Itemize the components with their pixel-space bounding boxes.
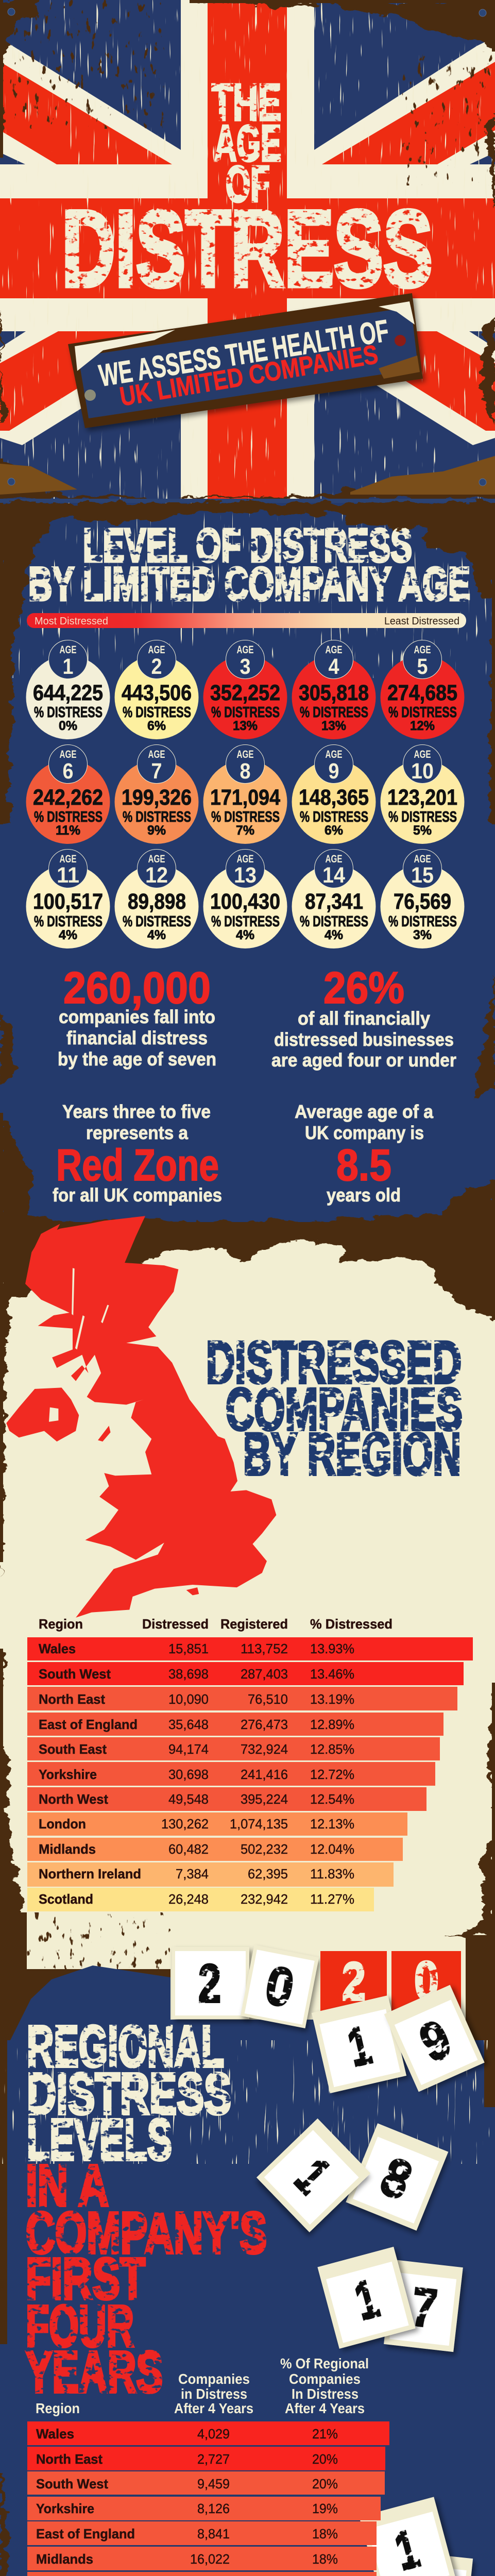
card: red 0: 0 [414, 1951, 439, 2011]
table header: % Distressed [310, 1616, 392, 1632]
row: Midlands [27, 2547, 377, 2570]
chart: age 4: % DISTRESS [300, 704, 368, 721]
row: South East: 94,174 [168, 1741, 209, 1757]
chart: age 10: 5% [413, 823, 432, 838]
chart: age 10: 10 [411, 759, 434, 784]
stat: average age 8.5: Average age of a [295, 1101, 434, 1122]
row: North East: 2,727 [197, 2451, 230, 2467]
row: North West: 12.54% [310, 1791, 354, 1807]
stat: 260,000 companies: 260,000 [63, 963, 211, 1013]
chart: age 6: AGE [60, 749, 76, 760]
panel: level of distress by company age [0, 499, 495, 1236]
chart: age 7: 9% [147, 823, 166, 838]
chart: age 3: 13% [233, 719, 258, 733]
panel: regional section background [0, 972, 495, 2020]
table header: Companies [178, 2371, 250, 2387]
row: North East: 76,510 [248, 1691, 288, 1707]
card: 1 [317, 2247, 416, 2349]
heading: in a company's first four years: COMPANY'S [26, 2200, 267, 2265]
chart: age 7: AGE [148, 749, 165, 760]
row: South West: 20% [312, 2476, 338, 2492]
heading: level of distress [28, 519, 470, 611]
chart: age 4: AGE [326, 644, 342, 656]
row: Yorkshire: 19% [312, 2501, 338, 2516]
row: Midlands: Midlands [39, 1841, 96, 1857]
chart: age 11 [26, 849, 110, 948]
chart: age 8: % DISTRESS [211, 809, 280, 825]
chart: age 2: 443,506 [122, 681, 192, 705]
chart: age 10 [380, 745, 465, 844]
chart: age 14 [292, 849, 376, 948]
chart: age 1: 1 [63, 654, 73, 679]
card: 1: 1 [349, 2268, 385, 2332]
chart: age 12: 89,898 [128, 889, 186, 914]
chart: age 8 [203, 745, 287, 844]
card: 8: 8 [373, 2146, 419, 2212]
row: London: London [39, 1816, 86, 1832]
chart: age 7 [114, 745, 199, 844]
flag: central cross [0, 0, 495, 499]
row: Scotland: 232,942 [241, 1891, 288, 1907]
row: South West: 38,698 [168, 1666, 209, 1682]
calendar cards: 2020 [172, 1945, 461, 2028]
stat: 26% of businesses [271, 963, 456, 1071]
row: North West: North West [39, 1791, 108, 1807]
card: 0 [241, 1945, 319, 2028]
row: Scotland: Scotland [39, 1891, 93, 1907]
row: Wales: 13.93% [310, 1641, 354, 1656]
map: streaks [72, 1268, 109, 1349]
row: Northern Ireland: Northern Ireland [39, 1866, 141, 1882]
row: East of England: 35,648 [168, 1717, 209, 1732]
chart: age 1: % DISTRESS [34, 704, 103, 721]
table header: Distressed [142, 1616, 209, 1632]
chart: age 5: 12% [410, 719, 435, 733]
stat: red zone: Years three to five [62, 1101, 211, 1122]
row: Yorkshire [27, 2497, 381, 2520]
rust band [0, 503, 495, 824]
label: we assess the health of uk limited companies: UK LIMITED COMPANIES [117, 340, 380, 412]
row: Wales: 113,752 [241, 1641, 288, 1656]
chart: age 5 [380, 640, 465, 739]
card: 1 [359, 2497, 456, 2576]
row: London [27, 1812, 407, 1836]
row: Scotland: 26,248 [168, 1891, 209, 1907]
chart: age 13 [203, 849, 287, 948]
chart: age 11: 100,517 [33, 889, 103, 914]
row: North East [27, 2447, 385, 2470]
chart: age 9: 9 [329, 759, 339, 784]
chart: age 9: AGE [326, 749, 342, 760]
table header: Region [39, 1616, 83, 1632]
chart: age 9: % DISTRESS [300, 809, 368, 825]
chart: age 12: % DISTRESS [123, 913, 191, 930]
flag: rust edges [0, 0, 495, 499]
chart: age 15: 15 [411, 863, 434, 888]
stat: 260,000 companies: by the age of seven [58, 1048, 216, 1070]
row: London: 1,074,135 [230, 1816, 288, 1832]
row: North West [27, 1787, 426, 1811]
heading: regional distress levels: DISTRESS [27, 2061, 231, 2126]
card: 2 [172, 1947, 249, 2019]
table header: in Distress [181, 2386, 247, 2402]
chart: age 10: 123,201 [387, 785, 457, 810]
card: 0: 0 [261, 1955, 299, 2019]
row: Midlands [27, 1838, 403, 1861]
row: North East: 10,090 [168, 1691, 209, 1707]
chart: age 14: 14 [322, 863, 345, 888]
chart: age 7: 7 [151, 759, 162, 784]
stat: average age 8.5: UK company is [305, 1122, 424, 1143]
row: North West [27, 2572, 377, 2576]
chart: age 15: 3% [413, 928, 432, 942]
chart: age 13: AGE [237, 853, 253, 865]
map: united kingdom [6, 1216, 276, 1618]
heading: in a company's first four years [26, 2153, 267, 2404]
calendar cards: 2019 [312, 1985, 485, 2093]
chart: age 1 [26, 640, 110, 739]
chart: age 3: % DISTRESS [211, 704, 280, 721]
label: we assess the health of uk limited companies [68, 293, 423, 428]
row: Wales: 4,029 [197, 2426, 230, 2442]
row: North East: 20% [312, 2451, 338, 2467]
icon: rivets [8, 8, 486, 486]
chart: age 5: 274,685 [387, 681, 457, 705]
row: Yorkshire: Yorkshire [36, 2501, 94, 2516]
chart: age 14: 4% [325, 928, 343, 942]
row: South West: 287,403 [241, 1666, 288, 1682]
table header [39, 1616, 392, 1632]
chart: age 9: 148,365 [299, 785, 369, 810]
table header [36, 2355, 369, 2416]
row: Wales: Wales [39, 1641, 76, 1656]
table header: After 4 Years [174, 2400, 253, 2416]
card: 1 [312, 1995, 406, 2093]
row: Wales [27, 1637, 473, 1660]
row: Yorkshire: Yorkshire [39, 1767, 97, 1782]
row: Midlands: Midlands [36, 2551, 93, 2567]
legend: most to least distressed scale: Least Distressed [384, 616, 459, 627]
card: 7 [384, 2260, 463, 2352]
row: East of England: East of England [36, 2526, 135, 2541]
chart: age 4 [292, 640, 376, 739]
chart: age 10: % DISTRESS [388, 809, 457, 825]
chart: age 8: 8 [240, 759, 250, 784]
row: North East: 13.19% [310, 1691, 354, 1707]
row: South East: South East [39, 1741, 107, 1757]
card: 2: 2 [198, 1954, 221, 2014]
row: North East [27, 1687, 457, 1710]
row: Yorkshire: 30,698 [168, 1767, 209, 1782]
title: the age of distress: OF [226, 156, 270, 212]
chart: age 2: AGE [148, 644, 165, 656]
chart: age 15: AGE [414, 853, 431, 865]
calendar cards: 2016 [359, 2497, 473, 2576]
table: first four years by region [27, 2355, 389, 2576]
row: South East: 12.85% [310, 1741, 354, 1757]
card: red 0 [391, 1951, 461, 2019]
row: Scotland: 11.27% [310, 1891, 354, 1907]
row: East of England: 8,841 [197, 2526, 230, 2541]
row: Yorkshire: 8,126 [197, 2501, 230, 2516]
table header: % Of Regional [280, 2355, 369, 2371]
row: Northern Ireland: 7,384 [176, 1866, 209, 1882]
heading: in a company's first four years: YEARS [26, 2340, 163, 2404]
chart: age 15: 76,569 [394, 889, 451, 914]
table header: Registered [220, 1616, 288, 1632]
row: Midlands: 12.04% [310, 1841, 354, 1857]
chart: age 11: % DISTRESS [34, 913, 103, 930]
table header: In Distress [292, 2386, 359, 2402]
chart: age 13: % DISTRESS [211, 913, 280, 930]
stat: average age 8.5 [295, 1101, 434, 1206]
panel: companies by sector background [0, 2473, 495, 2576]
stat: 26% of businesses: of all financially [298, 1008, 430, 1029]
row: South West [27, 2471, 385, 2495]
chart: age 12: 4% [147, 928, 166, 942]
row: Yorkshire: 12.72% [310, 1767, 354, 1782]
chart: age 6: 242,262 [33, 785, 103, 810]
row: Scotland [27, 1888, 374, 1911]
row: Wales: 21% [312, 2426, 338, 2442]
stat: 26% of businesses: distressed businesses [274, 1029, 454, 1050]
stat: red zone: represents a [86, 1122, 189, 1143]
row: South West: 13.46% [310, 1666, 354, 1682]
row: East of England: East of England [39, 1717, 138, 1732]
chart: age 3: 352,252 [210, 681, 280, 705]
chart: age 3 [203, 640, 287, 739]
chart: age 8: AGE [237, 749, 253, 760]
heading: regional distress levels [27, 2014, 231, 2172]
chart: age 15 [380, 849, 465, 948]
chart: age 4: 13% [321, 719, 346, 733]
row: Yorkshire: 241,416 [241, 1767, 288, 1782]
row: London: 130,262 [161, 1816, 209, 1832]
card: 6 [387, 2551, 473, 2576]
chart: age 4: 4 [329, 654, 339, 679]
row: East of England: 12.89% [310, 1717, 354, 1732]
chart: age 2: % DISTRESS [123, 704, 191, 721]
chart: age 1: 644,225 [33, 681, 103, 705]
chart: age 5: AGE [414, 644, 431, 656]
table header: Region [36, 2400, 80, 2416]
chart: age 1: AGE [60, 644, 76, 656]
chart: age 3: 3 [240, 654, 250, 679]
card: red 2: 2 [342, 1952, 366, 2012]
stat: 260,000 companies: companies fall into [59, 1006, 215, 1027]
stat: 26% of businesses: are aged four or under [271, 1049, 456, 1071]
panel: union jack flag header [0, 0, 495, 500]
row: Northern Ireland: 11.83% [310, 1866, 354, 1882]
legend: most to least distressed scale: Most Distressed [35, 616, 108, 627]
chart: age 5: 5 [417, 654, 428, 679]
flag: diagonal stripes [0, 37, 495, 445]
card: 1: 1 [343, 2015, 377, 2078]
row: Wales [27, 2421, 389, 2445]
chart: age 12: AGE [148, 853, 165, 865]
chart: age 14: 87,341 [305, 889, 363, 914]
chart: age 11: 4% [59, 928, 77, 942]
heading: regional distress levels: REGIONAL [27, 2014, 224, 2079]
chart: age 2: 6% [147, 719, 166, 733]
row: Northern Ireland [27, 1862, 394, 1887]
row: South East: 732,924 [241, 1741, 288, 1757]
heading: in a company's first four years: FOUR [26, 2294, 134, 2359]
heading: in a company's first four years: IN A [26, 2153, 109, 2218]
row: East of England: 276,473 [241, 1717, 288, 1732]
row: London: 12.13% [310, 1816, 354, 1832]
card: 9 [384, 1985, 485, 2092]
chart: age 14: % DISTRESS [300, 913, 368, 930]
calendar cards: 2017 [317, 2247, 463, 2352]
chart: age 6: % DISTRESS [34, 809, 103, 825]
chart: age 8: 7% [236, 823, 254, 838]
stat: red zone: for all UK companies [53, 1184, 222, 1206]
stat: 26% of businesses: 26% [323, 963, 404, 1013]
chart: age 9: 6% [325, 823, 343, 838]
heading: in a company's first four years: FIRST [26, 2246, 145, 2311]
chart: age 13: 13 [234, 863, 257, 888]
chart: age 7: 199,326 [122, 785, 192, 810]
chart: age 1: 0% [59, 719, 77, 733]
table header: Companies [289, 2371, 361, 2387]
row: Midlands: 18% [312, 2551, 338, 2567]
row: Yorkshire [27, 1762, 435, 1786]
chart: age 4: 305,818 [299, 681, 369, 705]
chart: age 7: % DISTRESS [123, 809, 191, 825]
chart: age 9 [292, 745, 376, 844]
chart: age 11: AGE [60, 853, 76, 865]
chart: age 2: 2 [151, 654, 162, 679]
stat: average age 8.5: 8.5 [336, 1141, 391, 1190]
chart: age 8: 171,094 [210, 785, 280, 810]
card: red 2 [320, 1951, 387, 2021]
chart: age 6: 11% [56, 823, 80, 838]
row: North West: 395,224 [241, 1791, 288, 1807]
chart: age 13: 4% [236, 928, 254, 942]
card: 7: 7 [408, 2277, 440, 2340]
card: 1: 1 [284, 2148, 342, 2205]
row: East of England: 18% [312, 2526, 338, 2541]
chart: age 12 [114, 849, 199, 948]
table: distressed companies by region [27, 1616, 473, 1911]
chart: age 11: 11 [57, 863, 79, 888]
row: Northern Ireland: 62,395 [248, 1866, 288, 1882]
row: South West: 9,459 [197, 2476, 230, 2492]
row: North East: North East [39, 1691, 105, 1707]
card: 8 [346, 2123, 448, 2231]
title: the age of distress [62, 74, 433, 309]
title: the age of distress: THE [212, 74, 281, 131]
chart: age 13: 100,430 [210, 889, 280, 914]
heading: regional distress levels: LEVELS [27, 2107, 172, 2172]
row: Midlands: 502,232 [241, 1841, 288, 1857]
card: 1 [257, 2119, 370, 2232]
chart: age 6 [26, 745, 110, 844]
row: North East: North East [36, 2451, 103, 2467]
row: Midlands: 16,022 [190, 2551, 230, 2567]
stat: 260,000 companies: financial distress [66, 1027, 208, 1048]
chart: age 6: 6 [63, 759, 73, 784]
card: 9: 9 [412, 2008, 459, 2074]
row: East of England [27, 2521, 377, 2545]
row: East of England [27, 1713, 443, 1736]
row: South West: South West [36, 2476, 108, 2492]
calendar cards: 2018 [257, 2119, 448, 2232]
title: the age of distress: AGE [214, 115, 281, 172]
stat: red zone: Red Zone [56, 1141, 219, 1190]
chart: age 14: AGE [326, 853, 342, 865]
chart: age 3: AGE [237, 644, 253, 656]
chart: age 2 [114, 640, 199, 739]
row: Midlands: 60,482 [168, 1841, 209, 1857]
row: South West [27, 1662, 464, 1685]
stat: average age 8.5: years old [327, 1184, 401, 1206]
row: Wales: 15,851 [168, 1641, 209, 1656]
legend: most to least distressed scale [27, 613, 466, 628]
chart: age 15: % DISTRESS [388, 913, 457, 930]
heading: distressed companies by region [206, 1330, 463, 1487]
stat: 260,000 companies [58, 963, 216, 1070]
panel: regional distress background [0, 1649, 495, 2576]
chart: age 12: 12 [145, 863, 168, 888]
table header: After 4 Years [285, 2400, 365, 2416]
chart: age 10: AGE [414, 749, 431, 760]
row: South East [27, 1737, 440, 1760]
row: South West: South West [39, 1666, 111, 1682]
row: Wales: Wales [36, 2426, 74, 2442]
row: North West: 49,548 [168, 1791, 209, 1807]
chart: age 5: % DISTRESS [388, 704, 457, 721]
stat: red zone [53, 1101, 222, 1206]
